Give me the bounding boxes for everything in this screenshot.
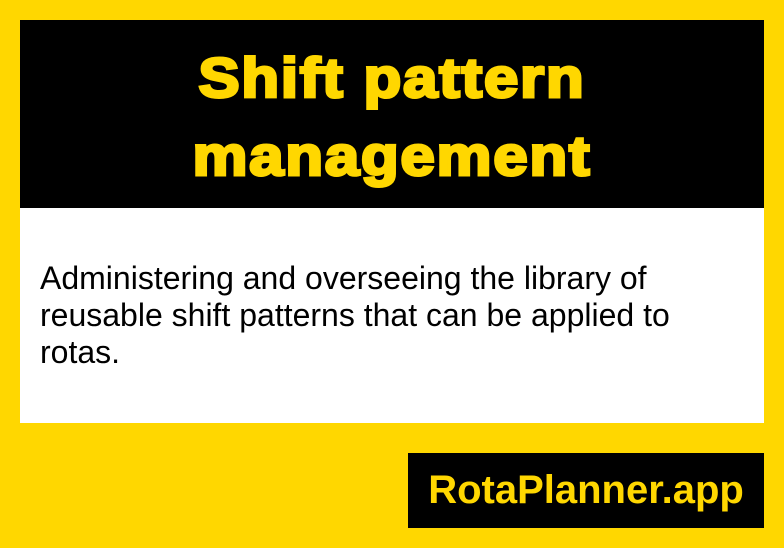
title xyxy=(193,46,591,188)
brand label: RotaPlanner.app xyxy=(428,468,744,512)
panel: description xyxy=(20,208,764,423)
brand label xyxy=(408,453,764,528)
text block: description: Administering and overseeing the library of reusable shift patterns that can be applied to rotas. xyxy=(40,260,670,370)
panel: header xyxy=(20,20,764,208)
title: Shift pattern xyxy=(198,46,586,109)
title: management xyxy=(193,124,591,187)
